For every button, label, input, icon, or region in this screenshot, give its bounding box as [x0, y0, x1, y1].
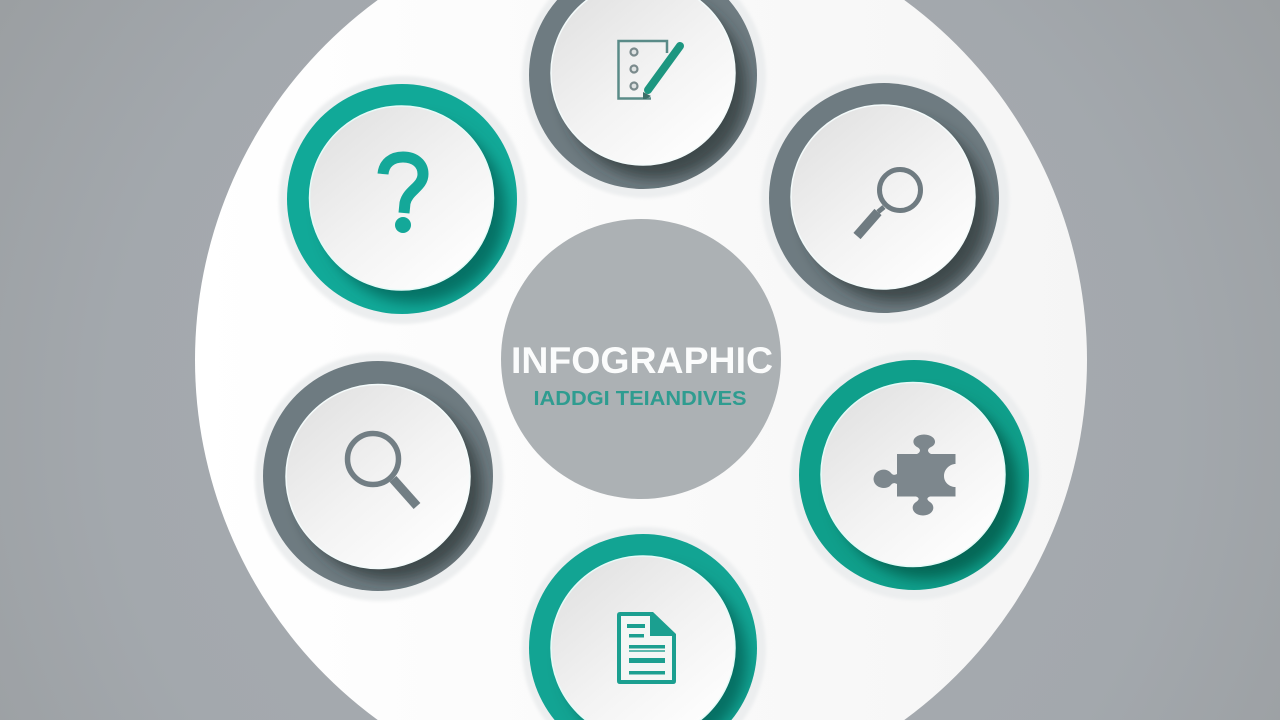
node: checklist (top): [522, 0, 766, 198]
centre circle with title: [501, 219, 781, 499]
node: magnifier (upper right): [761, 75, 1009, 323]
node: search (lower left): [255, 353, 503, 601]
icon: magnifier: [857, 170, 920, 236]
title: INFOGRAPHIC: [511, 340, 773, 381]
node: document (bottom): [522, 527, 766, 720]
node: puzzle (lower right): [791, 352, 1039, 600]
icon: question mark: [383, 157, 423, 233]
node: question (upper left): [279, 76, 527, 324]
icon: checklist and pencil: [618, 41, 680, 99]
icon: puzzle piece: [874, 434, 956, 516]
main white disc: [195, 0, 1087, 720]
icon: search: [348, 434, 417, 506]
subtitle: IADDGI TEIANDIVES: [534, 388, 746, 410]
icon: document: [617, 612, 676, 684]
